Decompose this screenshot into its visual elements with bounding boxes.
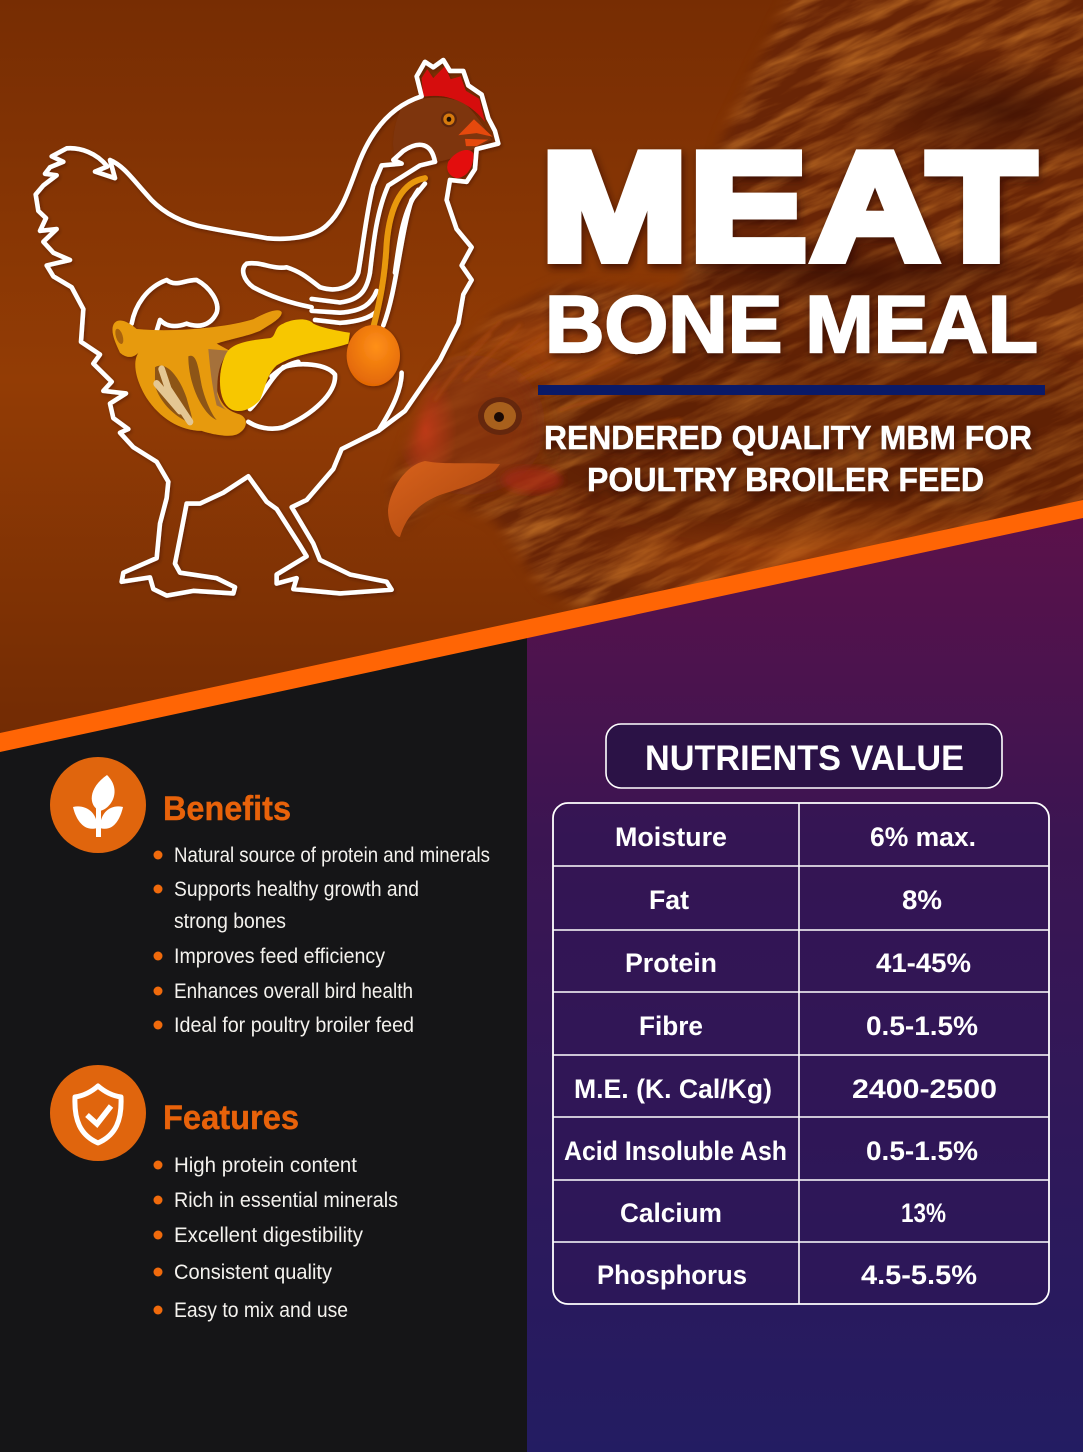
benefits list xyxy=(154,844,490,1037)
title underline xyxy=(538,385,1045,395)
nutrients table: 0.5-1.5% xyxy=(866,1136,978,1166)
features list: High protein content xyxy=(174,1154,357,1177)
icon: shield with check xyxy=(50,1065,146,1161)
subtitle: POULTRY BROILER FEED xyxy=(587,461,984,498)
neck and wing outlines xyxy=(243,145,435,325)
orange diagonal stripe xyxy=(0,500,1083,752)
chicken head xyxy=(393,98,492,162)
panel: benefits and features dark background xyxy=(0,630,527,1452)
nutrients table: 13% xyxy=(901,1198,946,1228)
benefits list: Improves feed efficiency xyxy=(174,945,385,968)
comb xyxy=(422,66,485,122)
yellow organ xyxy=(220,319,350,411)
benefits section xyxy=(50,757,490,1037)
heading: Benefits: Benefits xyxy=(163,790,291,828)
benefits list: Natural source of protein and minerals xyxy=(174,844,490,867)
intestine orange ribs xyxy=(112,310,282,436)
nutrients table: 6% max. xyxy=(870,822,976,852)
heading: Features: Features xyxy=(163,1099,299,1137)
nutrients table: 41-45% xyxy=(876,948,971,978)
nutrients table: Moisture xyxy=(615,822,727,852)
nutrients table: M.E. (K. Cal/Kg) xyxy=(574,1074,772,1104)
hen beak xyxy=(388,461,500,537)
icon: leaf sprout xyxy=(50,757,146,853)
features list: Consistent quality xyxy=(174,1261,332,1284)
chicken illustration xyxy=(36,60,498,596)
lower loop outline xyxy=(248,362,335,429)
hen eye xyxy=(478,397,562,493)
esophagus xyxy=(373,178,425,327)
benefits list: strong bones xyxy=(174,910,286,933)
nutrients table xyxy=(553,803,1049,1304)
benefits list: Ideal for poultry broiler feed xyxy=(174,1014,414,1037)
subtitle xyxy=(544,419,1032,498)
features list: Excellent digestibility xyxy=(174,1224,363,1247)
nutrients value heading xyxy=(606,724,1002,788)
wattle xyxy=(447,150,473,178)
features list xyxy=(154,1154,398,1322)
nutrients table: Acid Insoluble Ash xyxy=(564,1136,787,1166)
benefits list: Supports healthy growth and xyxy=(174,878,419,901)
subtitle: RENDERED QUALITY MBM FOR xyxy=(544,419,1032,456)
features section xyxy=(50,1065,398,1322)
background: brown top panel xyxy=(0,0,1083,760)
title line: MEAT: MEAT xyxy=(542,122,1035,291)
nutrients value heading: NUTRIENTS VALUE xyxy=(645,739,964,778)
hen photo backdrop xyxy=(388,0,1083,608)
eye xyxy=(441,111,457,127)
nutrients table: 8% xyxy=(902,885,942,915)
features list: Rich in essential minerals xyxy=(174,1189,398,1212)
upper organ outline xyxy=(132,280,217,331)
nutrients table: Fat xyxy=(649,885,689,915)
features list: Easy to mix and use xyxy=(174,1299,348,1322)
nutrients table: Phosphorus xyxy=(597,1260,747,1290)
body outline xyxy=(36,60,498,596)
inner feather notch xyxy=(378,373,402,431)
nutrients table: Protein xyxy=(625,948,717,978)
nutrients table: 2400-2500 xyxy=(852,1074,997,1104)
title xyxy=(542,122,1038,370)
benefits list: Enhances overall bird health xyxy=(174,980,413,1003)
nutrients table: 4.5-5.5% xyxy=(861,1260,977,1290)
nutrients table: Fibre xyxy=(639,1011,703,1041)
gizzard xyxy=(347,325,400,386)
panel: nutrients purple background xyxy=(527,510,1083,1452)
nutrients table: 0.5-1.5% xyxy=(866,1011,978,1041)
beak xyxy=(458,119,493,146)
head feather streaks xyxy=(435,322,680,440)
title line: BONE MEAL: BONE MEAL xyxy=(545,280,1038,370)
nutrients table: Calcium xyxy=(620,1198,722,1228)
